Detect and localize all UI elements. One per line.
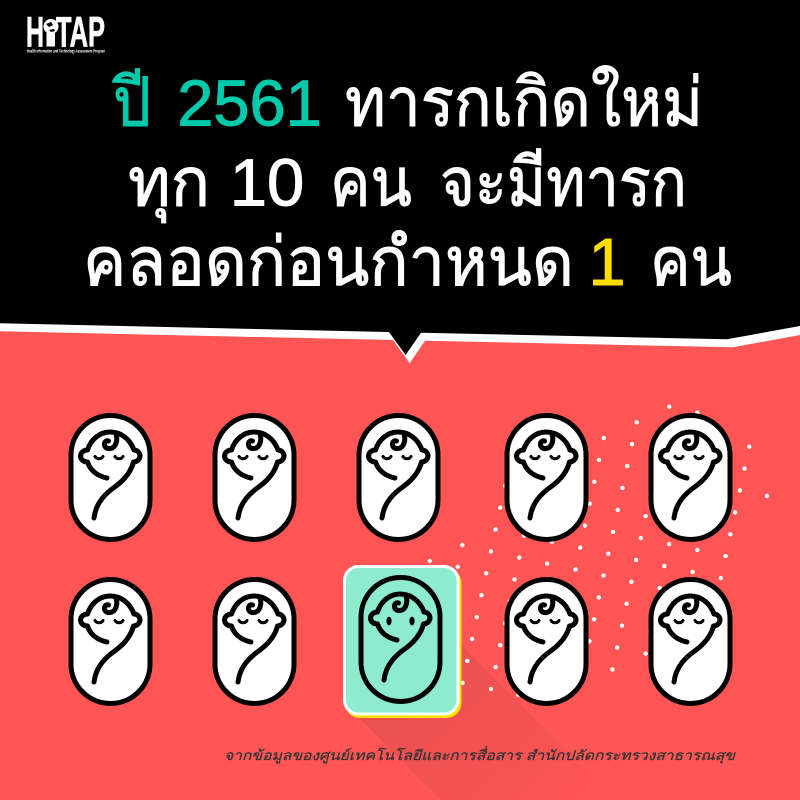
white border under black banner (0, 0, 800, 363)
dotted confetti pattern (430, 407, 767, 696)
long shadow of highlighted card (359, 645, 616, 800)
black title banner (0, 0, 800, 355)
title line 2: 10 (230, 146, 304, 221)
title line 2: คน (330, 146, 412, 221)
logo wordmark: H (26, 8, 44, 56)
title line 2 (128, 146, 687, 224)
baby icon awake (361, 578, 440, 702)
baby icon row 1, 5 (651, 416, 730, 540)
title line 1: 2561 (177, 67, 322, 140)
baby icon row 1, 4 (507, 416, 586, 540)
baby icon row 1, 2 (215, 416, 294, 540)
title line 3: คน (650, 225, 732, 300)
baby icon row 2, 4 (507, 580, 586, 704)
title line 2: ทุก (128, 146, 210, 224)
highlighted premature baby card (344, 566, 462, 718)
title line 1: ปี (112, 66, 151, 141)
card body (344, 566, 458, 714)
baby icon row 1, 3 (359, 416, 438, 540)
baby icon row 1, 1 (71, 416, 150, 540)
card yellow edge (345, 568, 462, 718)
title (83, 65, 732, 300)
title line 3: คลอดก่อนกำหนด (83, 225, 574, 300)
baby icon row 2, 5 (651, 580, 730, 704)
title line 2: จะมีทารก (440, 146, 687, 221)
logo tagline: Health Information and Technology Assessment Program (27, 48, 105, 54)
baby icon row 2, 1 (71, 580, 150, 704)
HiTAP logo (26, 8, 105, 56)
source note: จากข้อมูลของศูนย์เทคโนโลยีและการสื่อสาร สำนักปลัดกระทรวงสาธารณสุข (224, 746, 736, 764)
title line 1: ทารกเกิดใหม่ (345, 65, 703, 141)
logo globe (44, 19, 58, 34)
title line 1 (112, 65, 703, 141)
HiTAP logo: TAP (56, 8, 105, 56)
baby icon row 2, 2 (215, 580, 294, 704)
title line 3: 1 (588, 225, 626, 300)
